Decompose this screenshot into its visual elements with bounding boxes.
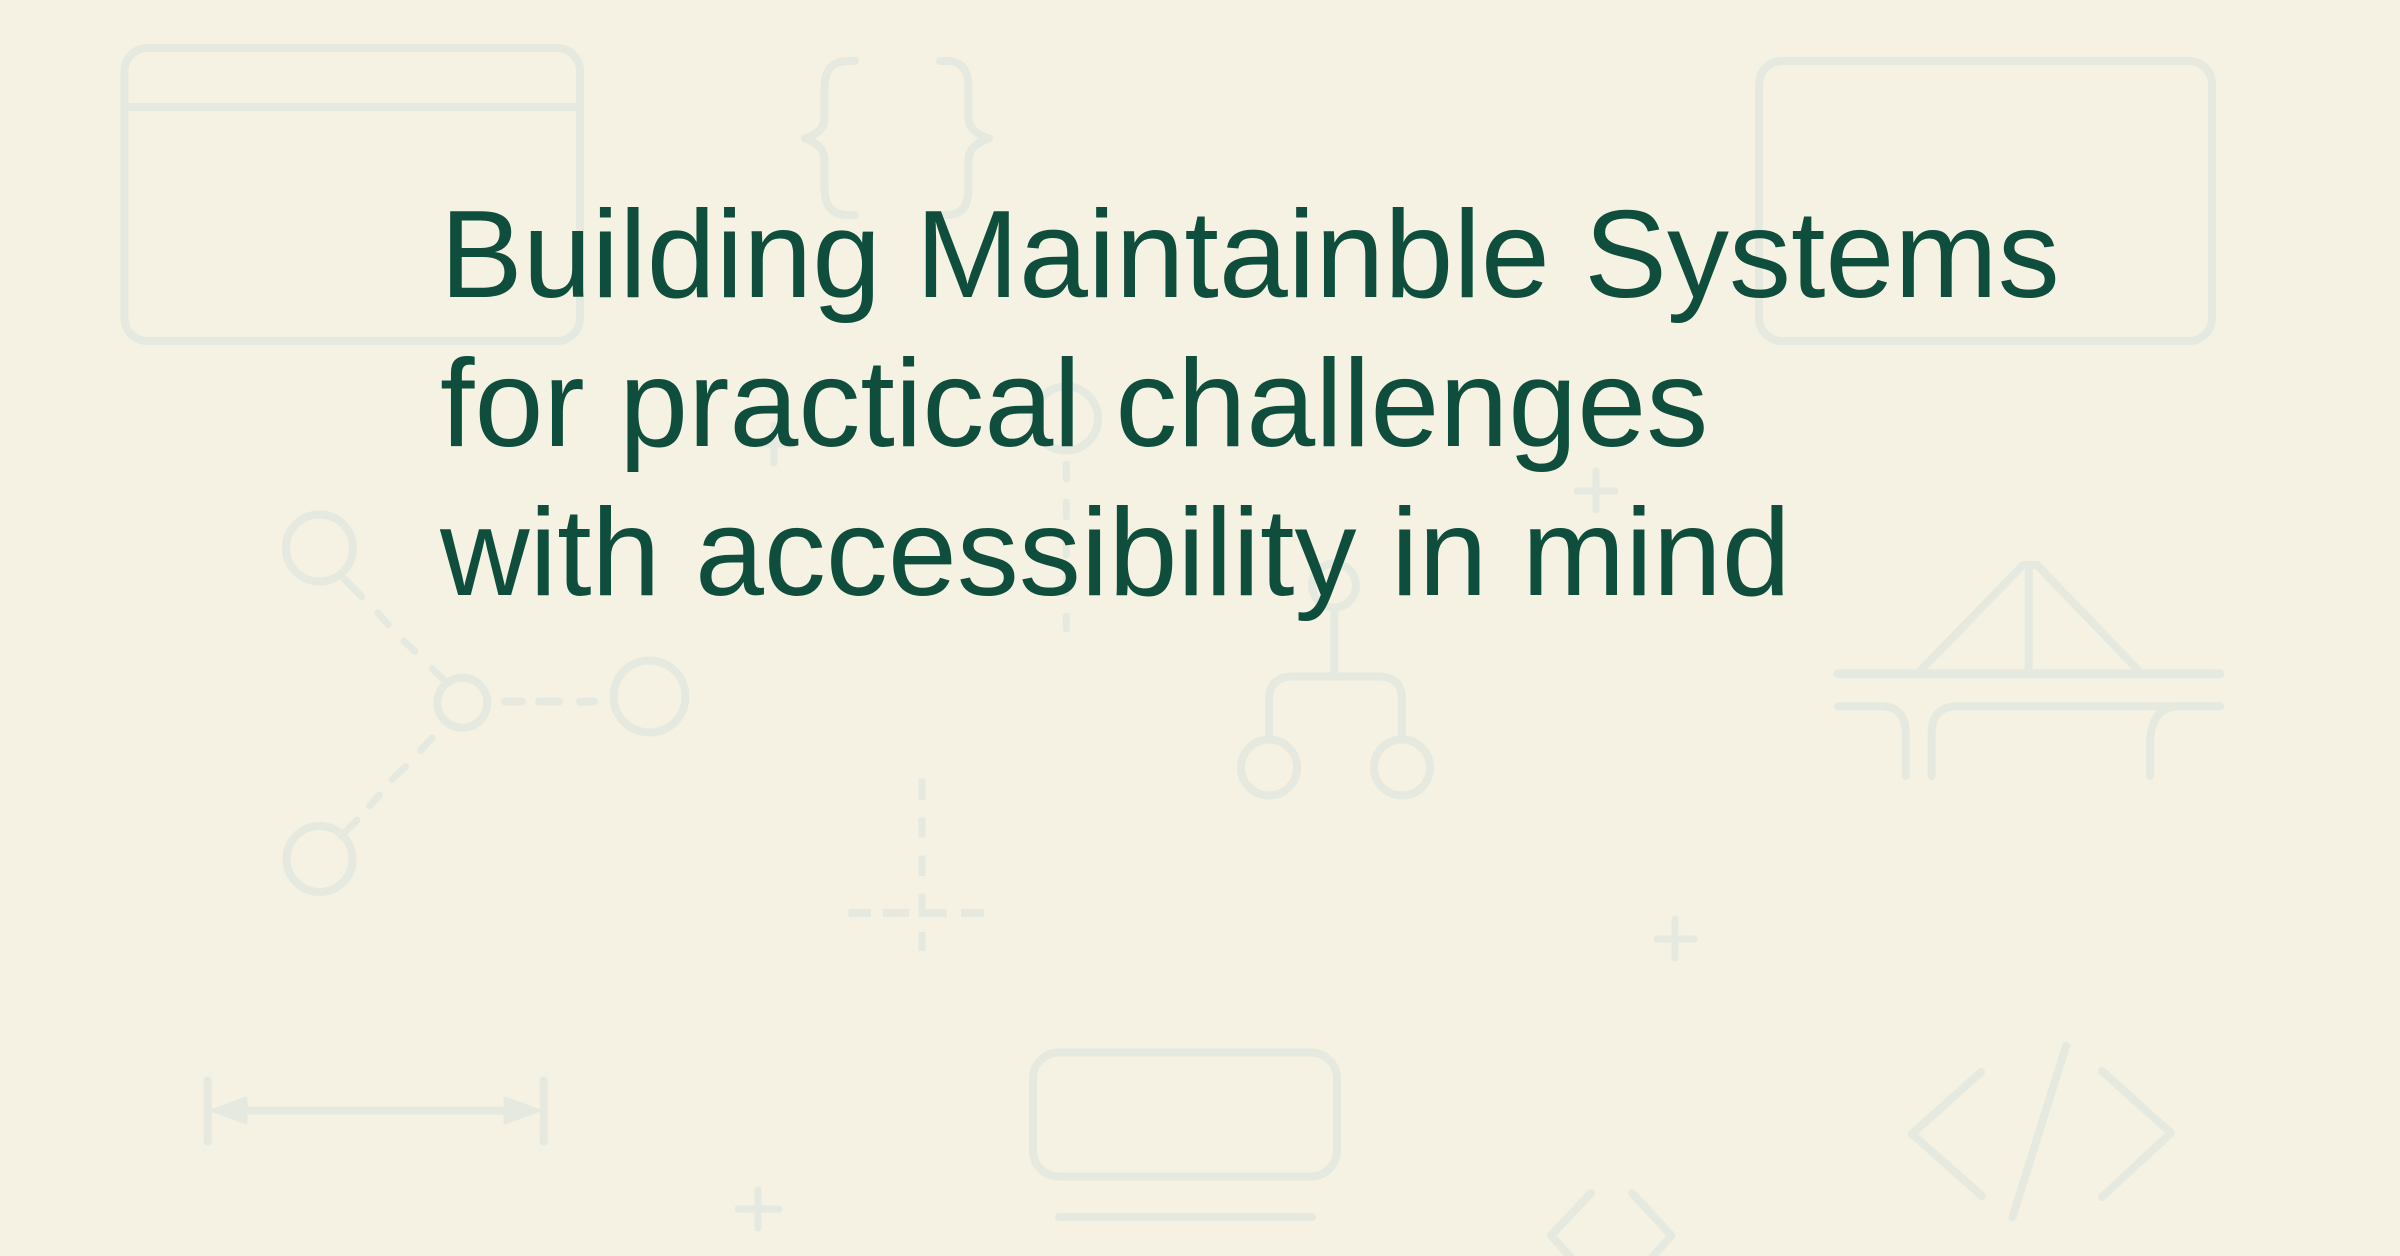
title: Building Maintainble Systems: [440, 186, 2060, 324]
icon: rounded rectangle: [1759, 61, 2212, 341]
icon: small plus right: [1577, 471, 1615, 510]
icon: curly braces: [805, 61, 989, 215]
icon: dashed crosshair: [848, 778, 984, 951]
title: for practical challenges: [440, 335, 1708, 473]
icon: network of nodes: [286, 514, 686, 892]
icon: code brackets: [1912, 1046, 2171, 1217]
icon: circle with dashed stem: [1034, 386, 1098, 629]
icon: monitor: [1033, 1052, 1337, 1217]
title: [440, 186, 2060, 622]
title: with accessibility in mind: [440, 484, 1791, 622]
icon: browser window: [124, 48, 580, 341]
icon: dimension arrow: [208, 1080, 544, 1142]
icon: small plus bottom: [738, 1190, 779, 1228]
icon: bridge: [1838, 565, 2220, 776]
icon: small plus lower right: [1657, 919, 1694, 958]
icon: small plus near second line: [755, 425, 793, 463]
icon: small code brackets bottom: [1551, 1193, 1672, 1256]
icon: org tree: [1241, 564, 1430, 796]
